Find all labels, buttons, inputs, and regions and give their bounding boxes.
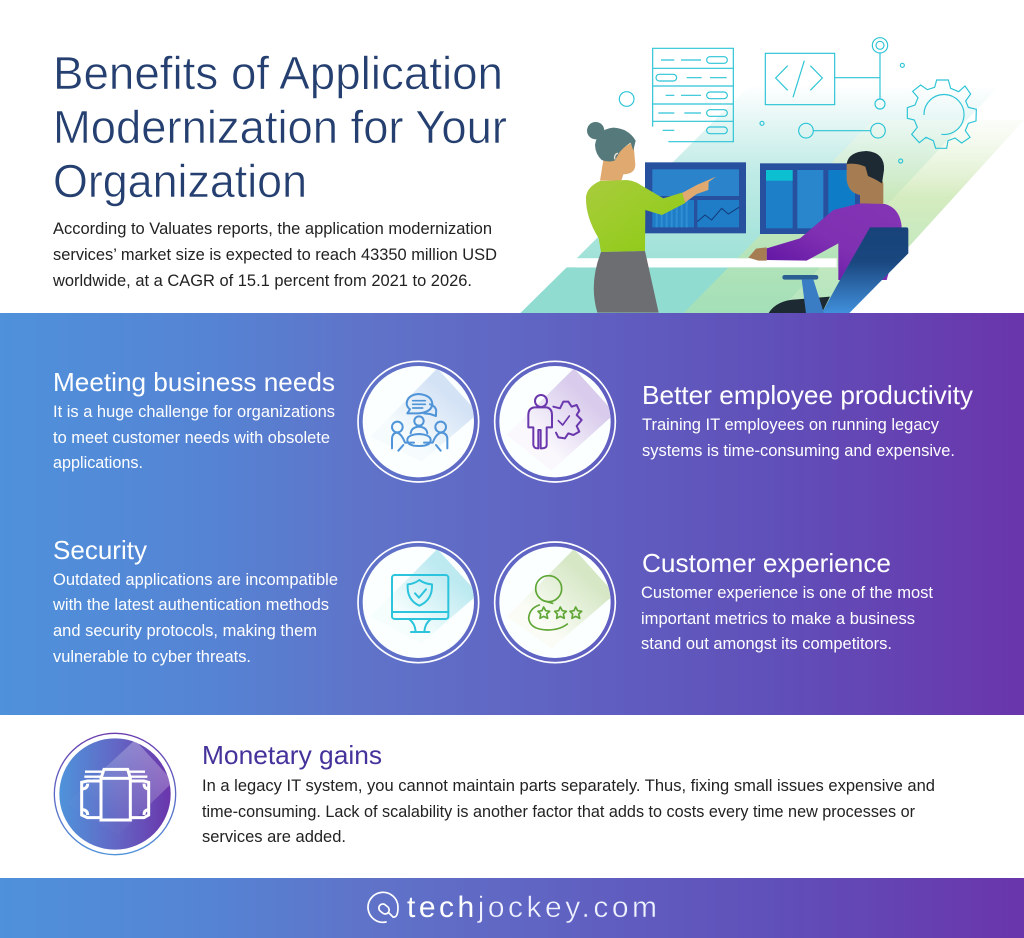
intro paragraph: According to Valuates reports, the application modernization [53, 220, 492, 238]
person: woman pointing [586, 122, 716, 313]
monetary gains text: In a legacy IT system, you cannot maintain parts separately. Thus, fixing small issues expensive and [202, 777, 935, 795]
title: Benefits of Application [53, 47, 503, 99]
benefit: security [52, 535, 338, 666]
benefit: meeting business needs [53, 367, 335, 472]
icon: techjockey logo [368, 892, 398, 922]
intro paragraph: services’ market size is expected to reach 43350 million USD [53, 246, 497, 264]
benefit: security: vulnerable to cyber threats. [53, 648, 251, 666]
benefit: better employee productivity [642, 380, 973, 460]
intro paragraph: worldwide, at a CAGR of 15.1 percent from 2021 to 2026. [52, 272, 472, 290]
person: man at desk [748, 151, 908, 313]
icons: benefit circles [358, 361, 615, 663]
benefit: customer experience: stand out amongst its competitors. [641, 635, 892, 653]
benefit: better employee productivity: Better employee productivity [642, 380, 973, 410]
panel: benefits band [0, 313, 1024, 715]
benefit: better employee productivity: systems is time-consuming and expensive. [642, 442, 955, 460]
monetary gains text: time-consuming. Lack of scalability is another factor that adds to costs every time new processes or [202, 803, 915, 821]
monetary gains text: Monetary gains [202, 740, 382, 770]
logo text: techjockey.com [407, 891, 657, 924]
icon: team meeting [358, 361, 479, 482]
monetary gains text [202, 740, 935, 846]
monitor: left [645, 162, 746, 233]
icon: employee with gear [495, 361, 615, 482]
title [53, 47, 507, 207]
benefit: security: Security [53, 535, 147, 565]
icon: code window and nodes [619, 38, 904, 163]
title: Organization [53, 155, 307, 207]
icon: server table [653, 48, 733, 142]
background diagonal shapes [520, 85, 1024, 313]
benefit: better employee productivity: Training IT employees on running legacy [642, 416, 940, 434]
icon: monetary gains coin [54, 733, 176, 855]
benefit: customer experience: Customer experience [642, 548, 891, 578]
title: Modernization for Your [53, 101, 507, 153]
footer band [0, 878, 1024, 938]
monitor: right [760, 163, 860, 234]
benefit: meeting business needs: It is a huge challenge for organizations [53, 403, 335, 421]
benefit: customer experience [641, 548, 933, 653]
benefit: meeting business needs: to meet customer needs with obsolete [53, 429, 330, 447]
monetary gains text: services are added. [202, 828, 346, 846]
benefit: meeting business needs: applications. [53, 454, 143, 472]
benefit: security: Outdated applications are incompatible [53, 571, 338, 589]
benefit: security: with the latest authentication methods [52, 596, 329, 614]
benefit: meeting business needs: Meeting business needs [53, 367, 335, 397]
intro paragraph [52, 220, 497, 290]
benefit: security: and security protocols, making them [53, 622, 317, 640]
benefit: customer experience: important metrics to make a business [641, 610, 915, 628]
icon: gear [907, 80, 976, 148]
icon: customer rating [495, 542, 615, 663]
icon: monitor with shield [358, 542, 479, 663]
benefit: customer experience: Customer experience is one of the most [641, 584, 933, 602]
illustration: team at monitors [520, 38, 1024, 313]
